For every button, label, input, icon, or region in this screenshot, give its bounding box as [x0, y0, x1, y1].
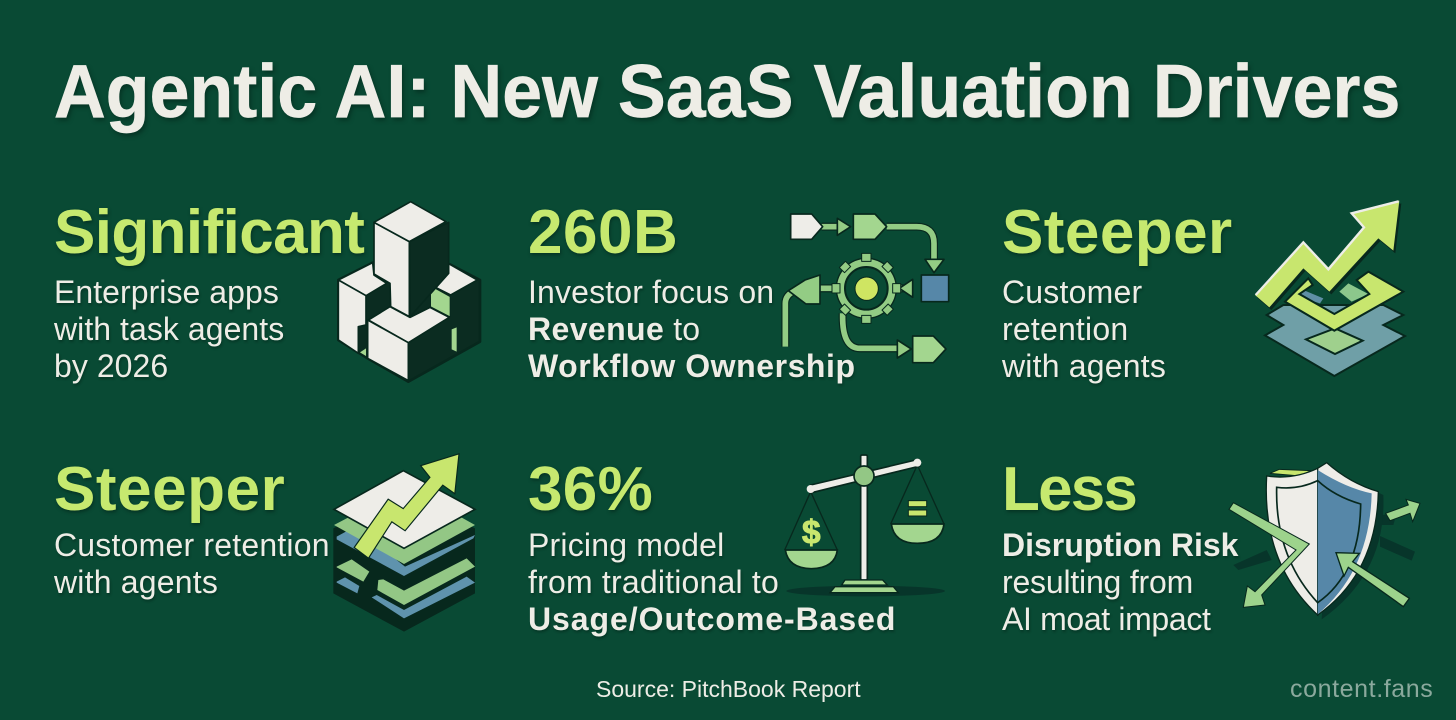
text: investor focus: Investor focus on	[528, 274, 774, 310]
text: customer retention: Customer retention	[54, 527, 330, 563]
text: enterprise apps: by 2026	[54, 348, 168, 384]
text: disruption risk: Disruption Risk	[1002, 527, 1238, 563]
title: Agentic AI: New SaaS Valuation Drivers	[54, 50, 1400, 134]
icon: dollar sign: $	[802, 514, 821, 551]
panel: steeper retention top	[1002, 198, 1233, 386]
panel: significant enterprise apps	[54, 198, 366, 386]
icon: growth arrow over layers	[1254, 200, 1407, 377]
text: customer retention: Customer	[1002, 274, 1142, 310]
text: disruption risk	[1002, 527, 1238, 638]
text: disruption risk: AI moat impact	[1002, 601, 1211, 637]
stat heading: 36%: 36%	[528, 455, 653, 524]
text: pricing model: Usage/Outcome-Based	[528, 601, 896, 637]
icon: stacked layers with arrow	[332, 453, 476, 632]
text: pricing model	[528, 527, 896, 638]
icon: workflow with gear	[781, 213, 950, 364]
icon: shield with deflected arrows	[1228, 462, 1420, 619]
panel: 260B workflow ownership	[528, 198, 856, 386]
text: disruption risk: resulting from	[1002, 564, 1193, 600]
text: pricing model: from traditional to	[528, 564, 779, 600]
source line: Source: PitchBook Report	[596, 676, 861, 702]
stat heading: 260B: 260B	[528, 198, 678, 267]
panel: less disruption risk	[1002, 455, 1238, 638]
text: enterprise apps: with task agents	[54, 311, 284, 347]
text: customer retention: with agents	[1002, 348, 1166, 384]
icon: balance scale	[784, 454, 945, 596]
brand watermark: content.fans	[1290, 675, 1433, 703]
text: pricing model: Pricing model	[528, 527, 724, 563]
text: customer retention	[1002, 274, 1166, 386]
text: enterprise apps	[54, 274, 284, 386]
text: investor focus: Workflow Ownership	[528, 348, 856, 384]
text: customer retention: retention	[1002, 311, 1128, 347]
stat heading: Steeper: Steeper	[1002, 198, 1233, 267]
text: customer retention: with agents	[54, 564, 218, 600]
stat heading: Steeper: Steeper	[54, 455, 285, 524]
text: investor focus	[528, 274, 856, 386]
panel: 36% pricing model	[528, 455, 896, 638]
text: enterprise apps: Enterprise apps	[54, 274, 279, 310]
panel: steeper retention bottom	[54, 455, 330, 602]
text: customer retention	[54, 527, 330, 602]
icon: isometric cubes	[337, 201, 482, 383]
stat heading: Significant: Significant	[54, 198, 364, 267]
stat heading: Less: Less	[1002, 455, 1136, 524]
text: investor focus: Revenue to	[528, 311, 700, 347]
